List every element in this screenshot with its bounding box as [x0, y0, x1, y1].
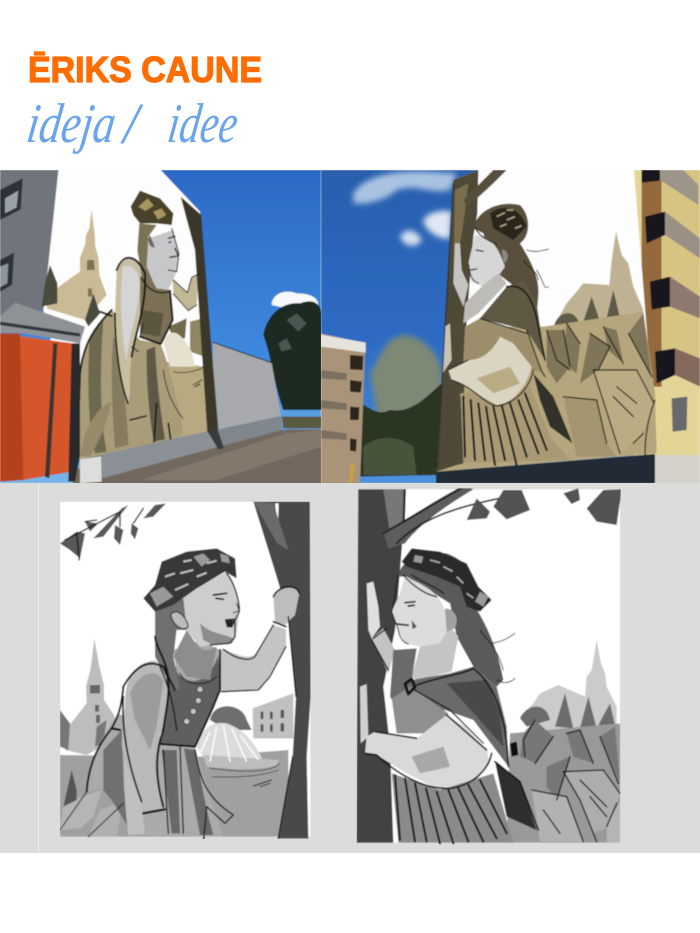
trunk	[357, 489, 405, 843]
left grey building	[0, 170, 58, 317]
hair and flower wreath	[473, 204, 538, 317]
bodice	[463, 318, 543, 373]
hair	[137, 223, 157, 290]
ear	[171, 612, 188, 629]
hand	[273, 587, 299, 625]
top leaves	[467, 488, 622, 525]
mural wall white	[437, 170, 657, 472]
face details	[213, 593, 235, 620]
pavement	[73, 429, 322, 485]
hand on trunk	[453, 243, 468, 307]
hands	[367, 582, 380, 638]
bodice	[392, 687, 448, 733]
plinth	[436, 454, 655, 483]
title: author name: ĒRIKS CAUNE	[28, 49, 262, 90]
raised arm	[173, 274, 199, 311]
bodice	[160, 650, 220, 747]
face details	[397, 602, 415, 625]
mural sand ground	[80, 362, 207, 460]
photo: mural visualisation on gabled building with orange annex	[0, 170, 322, 485]
sleeve raised	[372, 628, 395, 673]
sky	[0, 170, 321, 483]
church	[65, 638, 115, 755]
tree	[263, 301, 322, 410]
church	[553, 232, 643, 327]
clouds	[353, 171, 457, 246]
sketch 1: girl with flower wreath, church and fountain	[60, 502, 311, 843]
sky	[321, 170, 634, 483]
striped skirt	[460, 387, 570, 463]
grey background band	[0, 483, 700, 853]
subtitle: ideja / idee: ideja	[23, 93, 120, 155]
plants lower left	[60, 790, 102, 830]
trunk	[253, 502, 311, 838]
fountain	[197, 723, 263, 765]
shawl	[480, 280, 545, 360]
trees behind fountain	[210, 706, 252, 730]
face details	[168, 236, 178, 257]
ink outlines	[365, 573, 620, 842]
ink outlines	[60, 573, 299, 843]
outlines	[77, 228, 199, 457]
head	[177, 572, 239, 647]
dark trees	[353, 383, 442, 477]
subtitle: ideja / idee: idee	[164, 93, 242, 155]
paper	[60, 502, 311, 837]
leaves	[593, 370, 654, 453]
cream facade	[633, 170, 700, 483]
ground	[60, 750, 288, 837]
dress skirt	[392, 773, 513, 843]
trunk	[437, 170, 478, 472]
flower wreath	[143, 548, 237, 612]
sand lower mural	[437, 312, 657, 472]
bodice	[140, 277, 173, 344]
grey wall	[213, 342, 281, 431]
buttons	[184, 686, 203, 724]
distant apartment block	[321, 333, 365, 485]
cloud	[272, 292, 318, 310]
mural wall white	[43, 170, 213, 460]
dark cape end	[495, 762, 537, 830]
subtitle: ideja / idee: /	[120, 91, 144, 156]
cape	[390, 648, 508, 767]
girl arm	[115, 258, 145, 403]
arm	[365, 715, 490, 790]
leaves at top left	[60, 503, 166, 558]
hair and braid	[155, 598, 187, 690]
plant at lower left	[80, 402, 112, 457]
school building	[253, 693, 293, 738]
sketch 2: girl at tree with cape, church and large leaves	[357, 485, 622, 843]
arm	[448, 337, 532, 405]
girl skirt	[77, 310, 183, 457]
face	[392, 577, 452, 647]
trunk	[181, 197, 218, 433]
church	[520, 640, 617, 733]
raised arm	[218, 625, 286, 693]
shoulder and arm	[122, 661, 167, 813]
plinth	[84, 431, 218, 479]
leaves base	[507, 723, 620, 843]
bird mark	[253, 780, 272, 787]
ink lines	[437, 183, 655, 470]
subtitle: ideja / idee	[23, 91, 242, 156]
birch tree	[367, 332, 443, 414]
branch	[383, 485, 473, 548]
crown	[131, 191, 173, 225]
paper	[358, 489, 620, 843]
church	[47, 209, 107, 320]
face	[468, 235, 505, 287]
photo: mural visualisation on apartment block with balconies	[321, 170, 700, 485]
balconies	[660, 170, 698, 205]
building behind	[190, 318, 204, 357]
flower wreath	[402, 548, 492, 612]
orange annex	[0, 333, 73, 482]
fountain	[163, 332, 195, 367]
skirt	[87, 713, 223, 837]
hair	[398, 553, 503, 687]
dark cape edge	[533, 373, 573, 443]
neck and head	[143, 230, 179, 290]
